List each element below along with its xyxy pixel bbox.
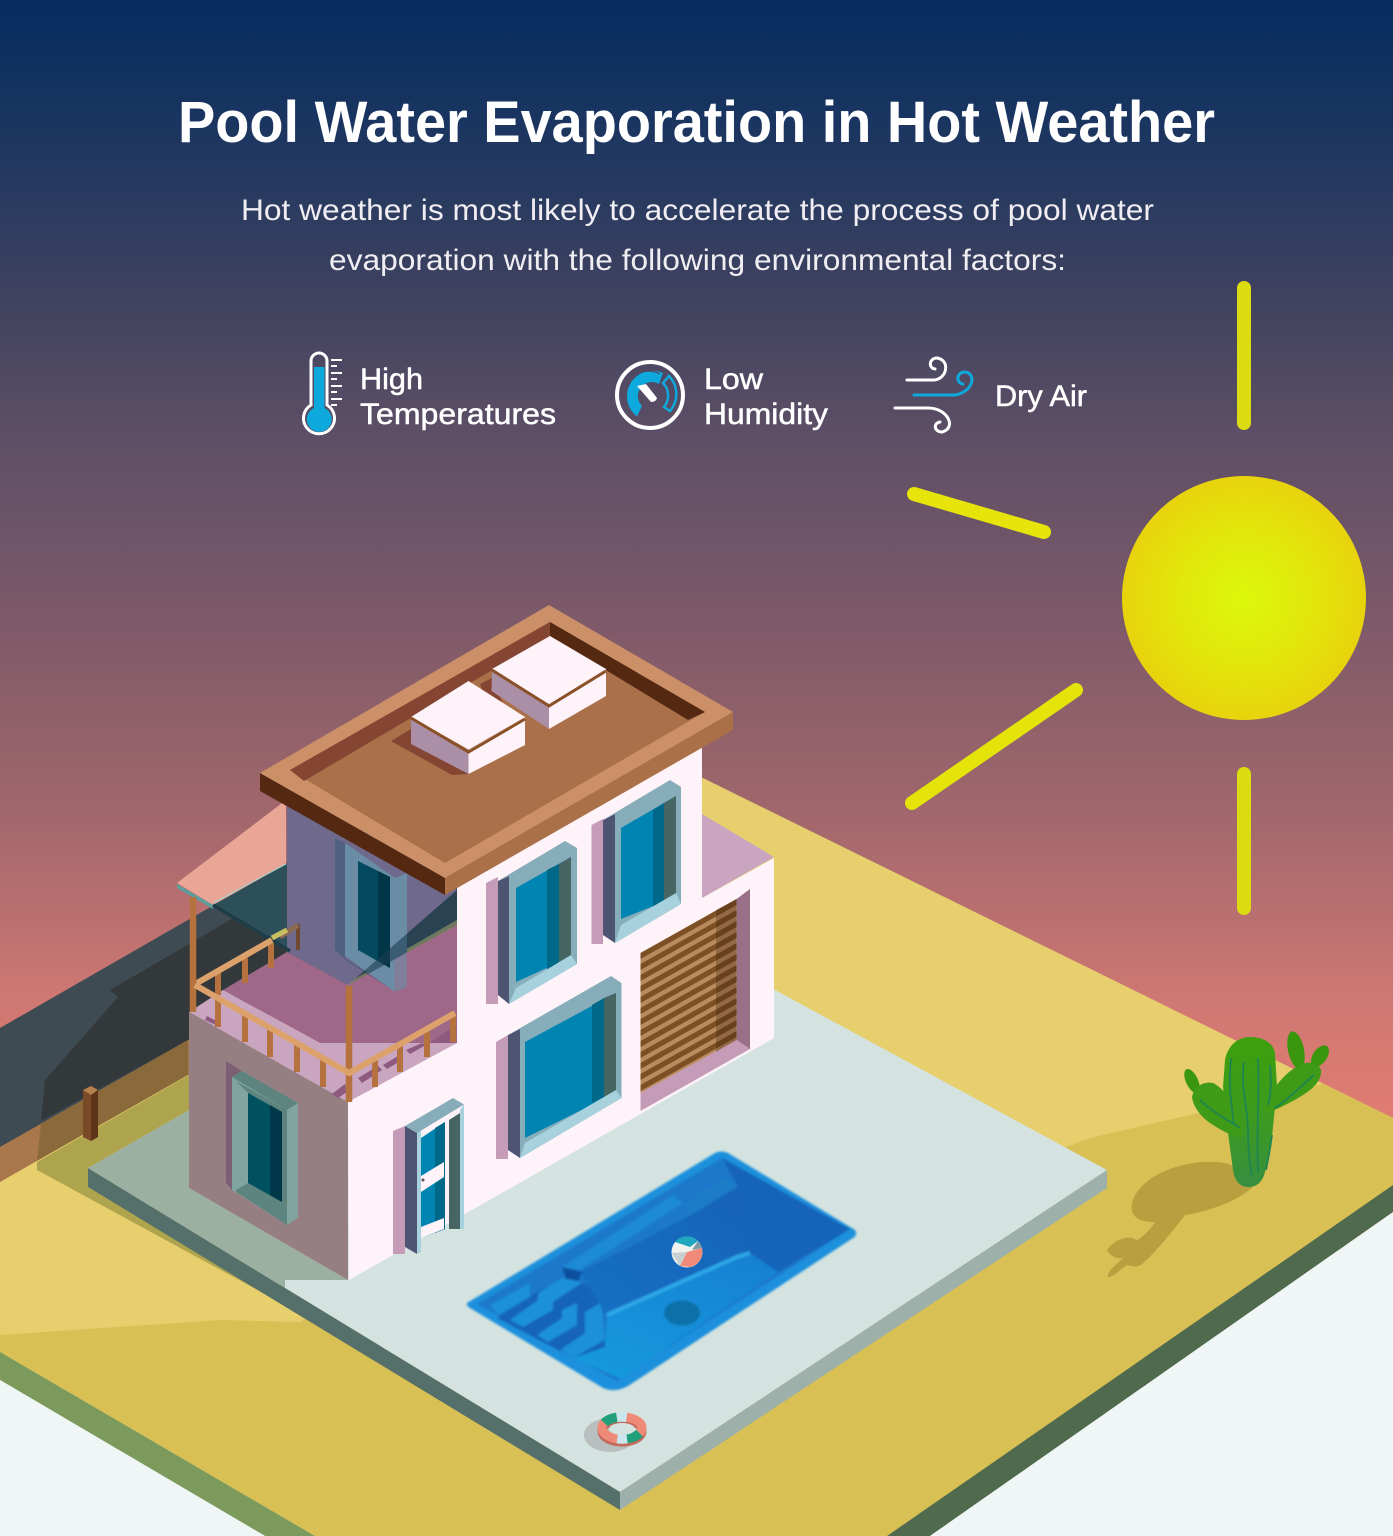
pool basin [467, 1152, 856, 1390]
icon: wind [895, 358, 972, 432]
cactus trunk [1223, 1037, 1277, 1187]
label: low humidity: Low [704, 363, 763, 396]
ground right edge [887, 1185, 1393, 1536]
parapet inner walls [550, 622, 705, 720]
house [177, 605, 774, 1280]
terrace [702, 814, 774, 898]
house shadow on ground [37, 1075, 285, 1305]
pool end wall [722, 1158, 850, 1272]
factor: dry air [895, 358, 1087, 432]
box shadows [391, 729, 470, 775]
ground lower tone [0, 1084, 1393, 1536]
icon: humidity gauge [617, 362, 683, 428]
label: high temperatures [360, 363, 556, 431]
life ring [584, 1417, 642, 1452]
title: Pool Water Evaporation in Hot Weather [178, 90, 1215, 155]
house: left lower face [189, 1012, 348, 1280]
pool step well [497, 1275, 605, 1358]
balcony floor shade [223, 925, 457, 1043]
cactus left arm [1192, 1083, 1243, 1137]
intro text: evaporation with the following environmental factors: [329, 244, 1066, 277]
ground base white left [0, 1380, 265, 1536]
cactus [1181, 1030, 1333, 1187]
icon: thermometer [304, 353, 342, 434]
cactus right arm [1265, 1063, 1321, 1113]
window: upper right [592, 780, 681, 944]
cactus shadow [1107, 1162, 1253, 1277]
balcony floor light [189, 990, 457, 1102]
window: upper middle [486, 841, 577, 1004]
roof box front [411, 681, 525, 774]
roof box rear [492, 636, 606, 729]
roof [260, 605, 733, 895]
cactus arm tips [1181, 1030, 1333, 1095]
pool shell [477, 1158, 850, 1381]
roof right fascia [445, 712, 733, 895]
pool deep wall [580, 1187, 750, 1315]
balcony railing [193, 897, 455, 1102]
house: white front wall [348, 745, 774, 1280]
pool floor edge highlight [607, 1253, 750, 1315]
swimming pool [467, 1152, 856, 1390]
factor: low humidity [617, 362, 828, 431]
beach ball [672, 1236, 702, 1268]
ground surface [0, 778, 1393, 1536]
slab shadow [88, 1110, 348, 1288]
rail shadows [205, 1016, 454, 1098]
pool drain [664, 1300, 700, 1326]
slab right side [620, 1170, 1107, 1510]
concrete slab [88, 895, 1107, 1510]
rail back [197, 930, 287, 995]
rail balusters [218, 998, 453, 1087]
glass canopy [177, 800, 457, 985]
pool floor [573, 1253, 778, 1379]
pool rim [467, 1152, 856, 1390]
roof deck [290, 622, 705, 863]
back wall [0, 706, 600, 1182]
label: low humidity: Humidity [704, 398, 828, 431]
window: lower large [496, 976, 622, 1159]
pool steps [490, 1278, 605, 1358]
sun rays [912, 288, 1244, 908]
roof left fascia [260, 773, 445, 895]
intro text: Hot weather is most likely to accelerate the process of pool water [241, 194, 1154, 227]
label: dry air: Dry Air [995, 380, 1087, 413]
sun disc [1122, 476, 1366, 720]
front door [393, 1098, 464, 1254]
balcony wall [287, 805, 457, 985]
factor: high temperatures [304, 353, 556, 434]
rail posts [193, 897, 349, 1102]
fence post [83, 1086, 98, 1141]
ground base white right [930, 1212, 1393, 1536]
ground [0, 778, 1393, 1536]
intro text [241, 194, 1154, 277]
sun [912, 288, 1366, 908]
rail back return [296, 924, 300, 950]
ground left edge [0, 1352, 315, 1536]
slab top [88, 895, 1107, 1492]
garage louvers [640, 889, 750, 1111]
rail front [195, 985, 455, 1073]
pool ledge [562, 1195, 683, 1270]
window: left side [226, 1061, 298, 1225]
balcony window [335, 838, 407, 992]
label: high temperatures: Temperatures [360, 398, 556, 431]
roof rim [260, 605, 733, 878]
label: low humidity [704, 363, 828, 431]
label: high temperatures: High [360, 363, 423, 396]
slab left side [88, 1168, 620, 1510]
cactus ribs [1200, 1058, 1314, 1175]
